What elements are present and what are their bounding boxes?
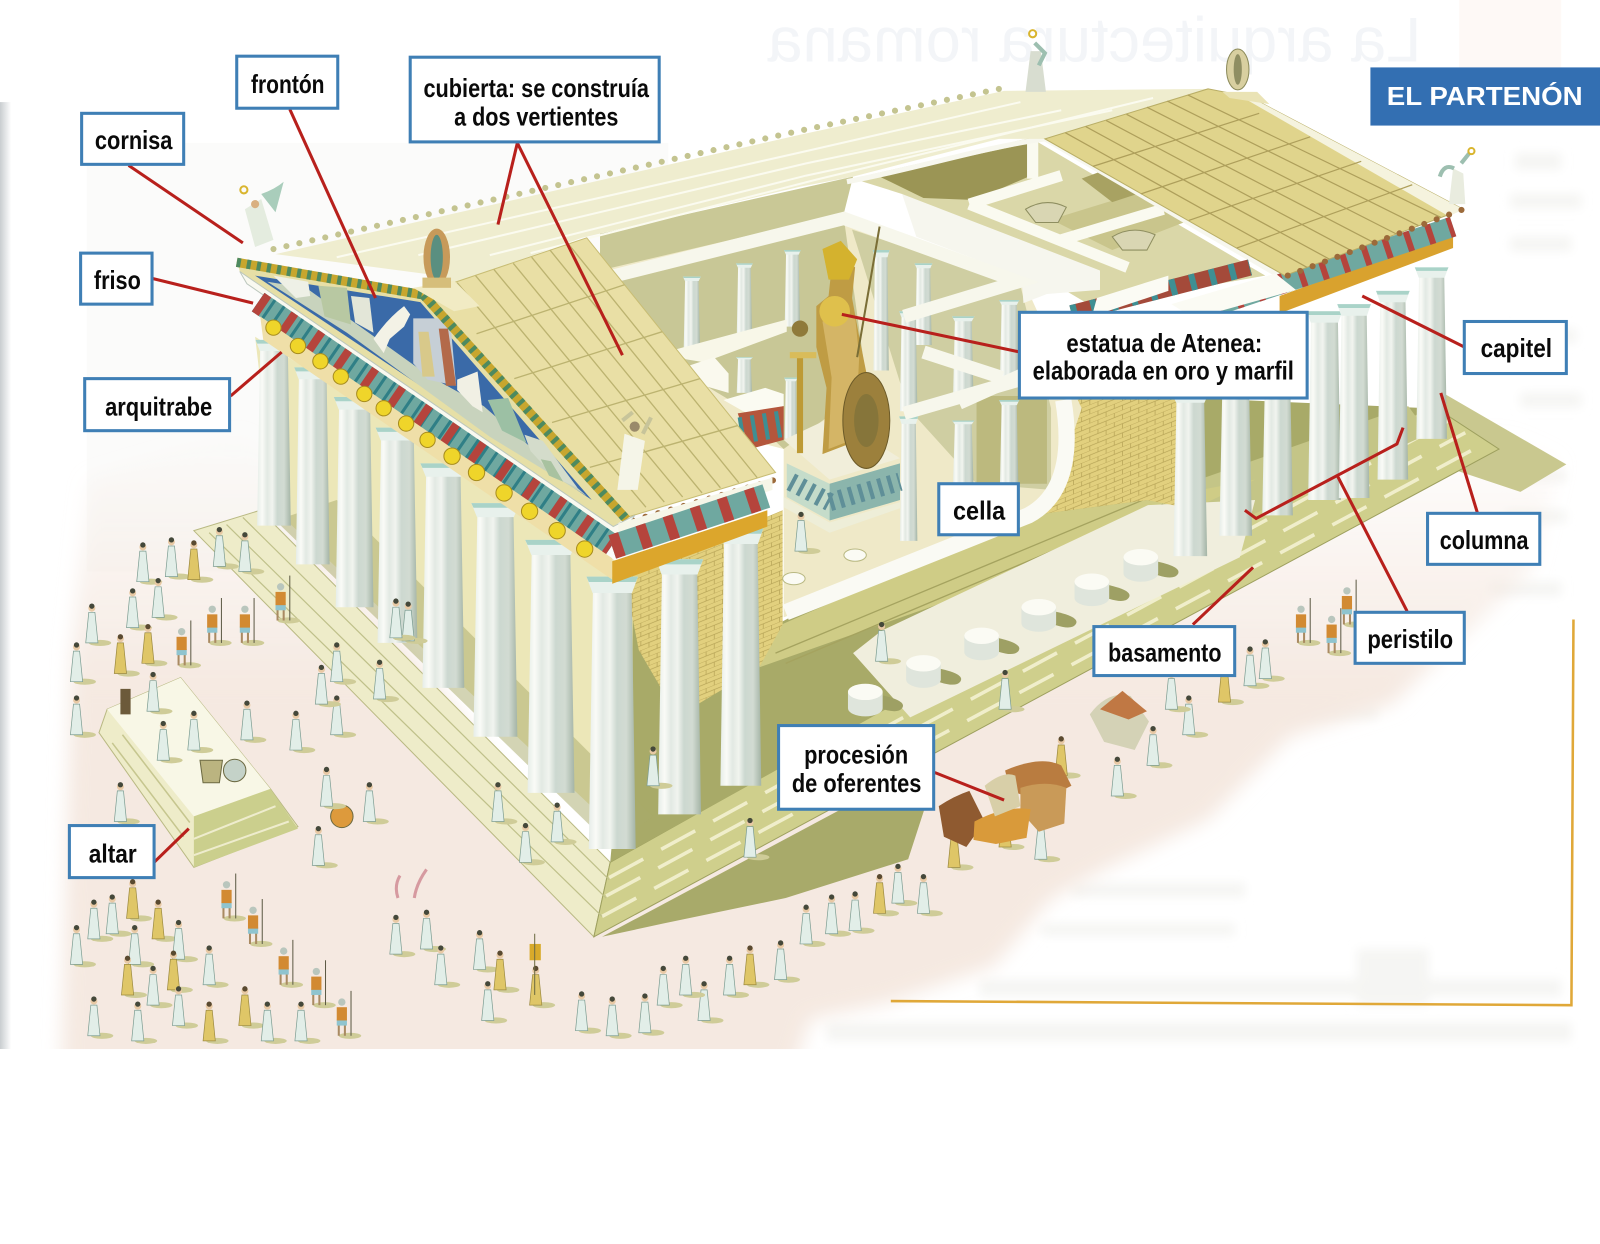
eave antefixes — [633, 480, 776, 520]
label: cubierta — [410, 57, 659, 142]
banner standard — [530, 934, 541, 995]
leader: procesión — [935, 773, 1004, 800]
leader: columna — [1441, 393, 1478, 513]
label: estatua de Atenea: elaborada en oro y marfil — [1033, 358, 1294, 386]
leader: basamento — [1193, 567, 1253, 625]
cella right wall — [852, 230, 1051, 490]
label: basamento — [1094, 627, 1235, 676]
front left roof — [423, 238, 776, 520]
wall behind left colonnade — [255, 337, 633, 816]
ghost show-through text lines — [827, 153, 1582, 1041]
temple shadow front — [602, 781, 934, 937]
illustration: Parthenon temple — [194, 88, 1499, 937]
step highlights — [602, 420, 1482, 916]
oxen procession — [939, 691, 1149, 847]
cella white frame — [607, 218, 1020, 413]
acroterion: palmette right — [1222, 49, 1269, 104]
acroterion: palmette centre — [422, 229, 451, 288]
acroterion: back figure — [1026, 30, 1046, 92]
right colonnade floor — [1173, 406, 1429, 551]
cella frame columns — [899, 300, 1019, 541]
label: estatua de Atenea: estatua de Atenea: — [1066, 330, 1262, 358]
label: procesión de oferentes: procesión — [804, 741, 908, 769]
stylobate steps, left side — [194, 510, 610, 937]
right roof — [1045, 89, 1463, 276]
small drums in cella — [783, 549, 866, 585]
label: cornisa: cornisa — [95, 127, 173, 155]
altar braziers — [120, 689, 246, 783]
label: capitel: capitel — [1481, 335, 1552, 363]
rear roof slope — [273, 88, 1208, 289]
right entablature — [1171, 227, 1453, 318]
label: procesión de oferentes: de oferentes — [792, 770, 921, 798]
mask below scan edge — [0, 1049, 1600, 1244]
statue base — [784, 416, 900, 533]
label: capitel — [1464, 321, 1566, 374]
statue shield — [843, 373, 890, 468]
label: cella: cella — [953, 497, 1006, 525]
cella interior — [602, 213, 1082, 617]
leader: friso — [153, 279, 253, 303]
cella back wall — [602, 218, 867, 449]
column drums — [848, 549, 1179, 716]
flying ribbons — [396, 869, 427, 898]
cornice — [240, 271, 635, 539]
leader: arquitrabe — [231, 352, 282, 396]
label: peristilo — [1355, 612, 1464, 663]
frieze — [258, 302, 766, 547]
cella back colonnade — [673, 250, 932, 439]
pale floor with drums — [853, 500, 1255, 717]
frieze block in cella — [723, 388, 784, 449]
pediment sculptures — [273, 276, 578, 488]
label: peristilo: peristilo — [1367, 626, 1453, 654]
leader: estatua — [842, 314, 1020, 352]
label: frontón: frontón — [251, 71, 324, 99]
white cella ledge and curved cut — [786, 400, 1067, 612]
pediment tympanum — [237, 260, 627, 527]
label: friso — [81, 253, 152, 304]
statue body — [816, 255, 867, 454]
statue offering column — [790, 320, 816, 453]
brick foot of the cella wall — [759, 480, 1255, 667]
leader: altar — [153, 829, 189, 863]
leader lines — [129, 109, 1478, 863]
label: altar — [69, 826, 154, 878]
label: arquitrabe — [85, 379, 230, 431]
leader: peristilo — [1245, 428, 1407, 611]
rear antefixes — [273, 88, 1004, 249]
statue spear — [857, 227, 880, 357]
brick front wall — [624, 510, 783, 716]
label: frontón — [237, 56, 338, 108]
ground — [61, 393, 1561, 1082]
bottom right gold frame — [891, 619, 1573, 1005]
cauldron — [331, 805, 353, 828]
leader: cornisa — [129, 165, 243, 243]
label: procesión de oferentes — [779, 726, 934, 809]
label: cubierta: cubierta: se construía — [423, 75, 650, 103]
acroterion: winged victory left — [240, 182, 284, 247]
banner: EL PARTENÓN — [1370, 67, 1600, 126]
label: arquitrabe: arquitrabe — [105, 393, 212, 421]
rear frieze — [1071, 267, 1250, 313]
acroterion: right figure — [1440, 148, 1474, 204]
front left colonnade — [255, 340, 763, 849]
pediment sculpture base band — [267, 282, 587, 496]
ghost show-through title: La arquitectura romana — [767, 5, 1421, 75]
leader: frontón — [290, 109, 376, 298]
label: basamento: basamento — [1108, 639, 1221, 667]
leader: cubierta — [498, 143, 622, 355]
right colonnade — [1172, 267, 1448, 556]
temple shadow right — [1429, 393, 1566, 492]
floor shadow — [610, 398, 1429, 862]
people: crowd — [70, 512, 1366, 1044]
acroterion: front figure — [617, 412, 651, 490]
label: cubierta: a dos vertientes — [454, 104, 618, 132]
label: columna: columna — [1440, 527, 1529, 555]
label: estatua de Atenea — [1019, 312, 1307, 398]
brick long wall — [1031, 383, 1199, 515]
stylobate steps, front side — [594, 403, 1499, 937]
altar — [99, 678, 298, 867]
label: altar: altar — [89, 840, 137, 868]
underside of rear roof — [600, 177, 853, 270]
label: cella — [939, 484, 1018, 535]
upper interior beams — [847, 138, 1288, 306]
architrave with gold discs — [260, 316, 767, 584]
label: columna — [1428, 513, 1540, 564]
banner: EL PARTENÓN: EL PARTENÓN — [1387, 81, 1583, 111]
label: friso: friso — [94, 267, 141, 295]
leader: capitel — [1362, 296, 1464, 347]
label: cornisa — [82, 113, 184, 164]
statue of Athena — [784, 227, 900, 533]
